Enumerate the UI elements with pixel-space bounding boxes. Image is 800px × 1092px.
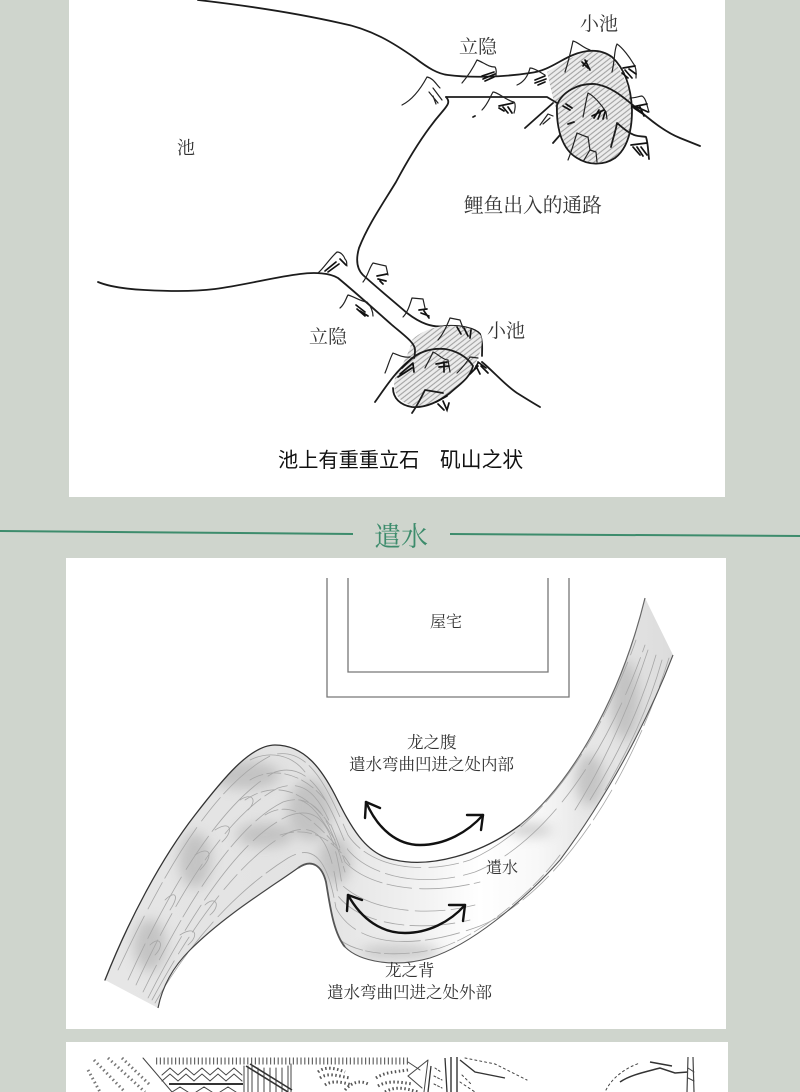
heading text: 遣水 — [374, 522, 428, 552]
label: inner bend: 遣水弯曲凹进之处内部 — [349, 755, 514, 774]
label: 立隐 upper: 立隐 — [459, 36, 498, 58]
panel: pond diagram — [69, 0, 725, 497]
panel: woodblock illustration — [66, 1042, 728, 1092]
label: outer bend: 遣水弯曲凹进之处外部 — [327, 983, 492, 1002]
label: 池: 池 — [177, 138, 195, 158]
panel: 遣水 diagram — [66, 558, 726, 1029]
river — [105, 598, 673, 1008]
right rule — [450, 534, 800, 536]
rocks: upper pond — [540, 41, 649, 162]
rocks: lower channel and pond — [318, 252, 488, 413]
caption: 池上有重重立石 — [278, 450, 419, 472]
label: carp route: 鲤鱼出入的通路 — [464, 195, 602, 217]
river tonal blotches — [134, 660, 639, 971]
house plan — [327, 578, 569, 697]
river banks — [105, 598, 673, 1008]
label: 龙之腹: 龙之腹 — [407, 733, 457, 752]
lower shoreline and channel — [98, 273, 540, 407]
label: 小池 upper: 小池 — [580, 13, 618, 35]
upper small pond shading — [547, 50, 632, 164]
rocks: upper channel — [402, 60, 546, 117]
label: 小池 lower: 小池 — [487, 320, 525, 342]
label: 龙之背: 龙之背 — [385, 961, 434, 980]
section heading: 遣水 — [0, 522, 800, 552]
flow lines — [118, 640, 669, 1003]
upper shoreline and channel — [198, 0, 700, 356]
label: 立隐 lower: 立隐 — [309, 326, 348, 348]
arrow: upper curved double arrow — [365, 802, 483, 845]
illustration: pavilion and trees — [88, 1057, 694, 1092]
label: 屋宅: 屋宅 — [430, 613, 462, 631]
label: 遣水: 遣水 — [486, 858, 518, 877]
arrow: lower curved double arrow — [347, 895, 465, 933]
lower small pond shading — [394, 326, 482, 406]
left rule — [0, 531, 353, 534]
caption: 矶山之状 — [440, 449, 523, 472]
